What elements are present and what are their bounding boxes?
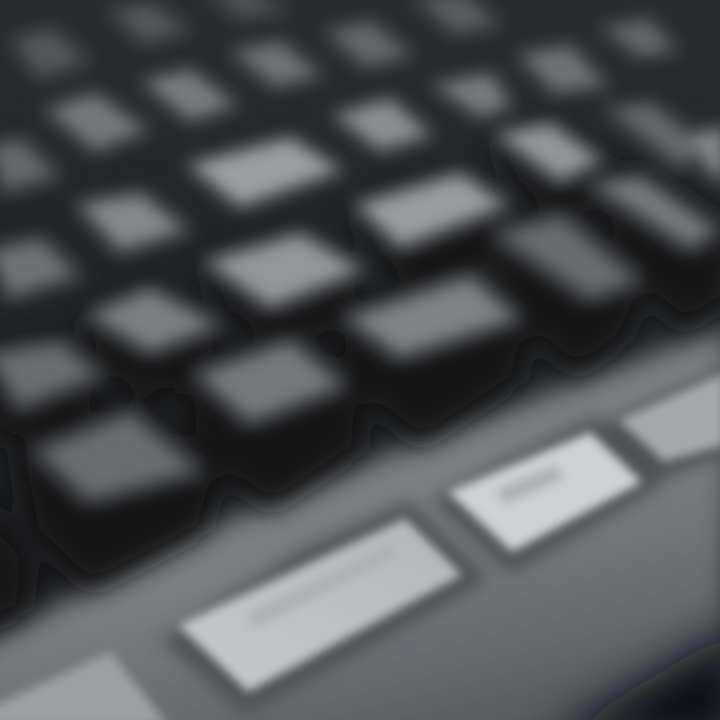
top row key tops [14, 30, 86, 76]
key: bottom-left light key [0, 652, 168, 720]
key tops [0, 0, 720, 498]
third row key tops [80, 194, 185, 250]
key: small light key [448, 432, 642, 552]
front row key tops [40, 415, 195, 498]
dark key bodies [0, 125, 720, 630]
label smudges on light keys [245, 465, 565, 628]
light key shadows [160, 365, 720, 715]
fourth row key tops [48, 94, 146, 150]
key: right light key [618, 372, 720, 462]
key: long light key [178, 518, 462, 692]
dark lower-right corner [540, 625, 720, 720]
second row key tops [92, 290, 215, 350]
light keys on the deck [0, 365, 720, 720]
keyboard deck [0, 325, 720, 720]
